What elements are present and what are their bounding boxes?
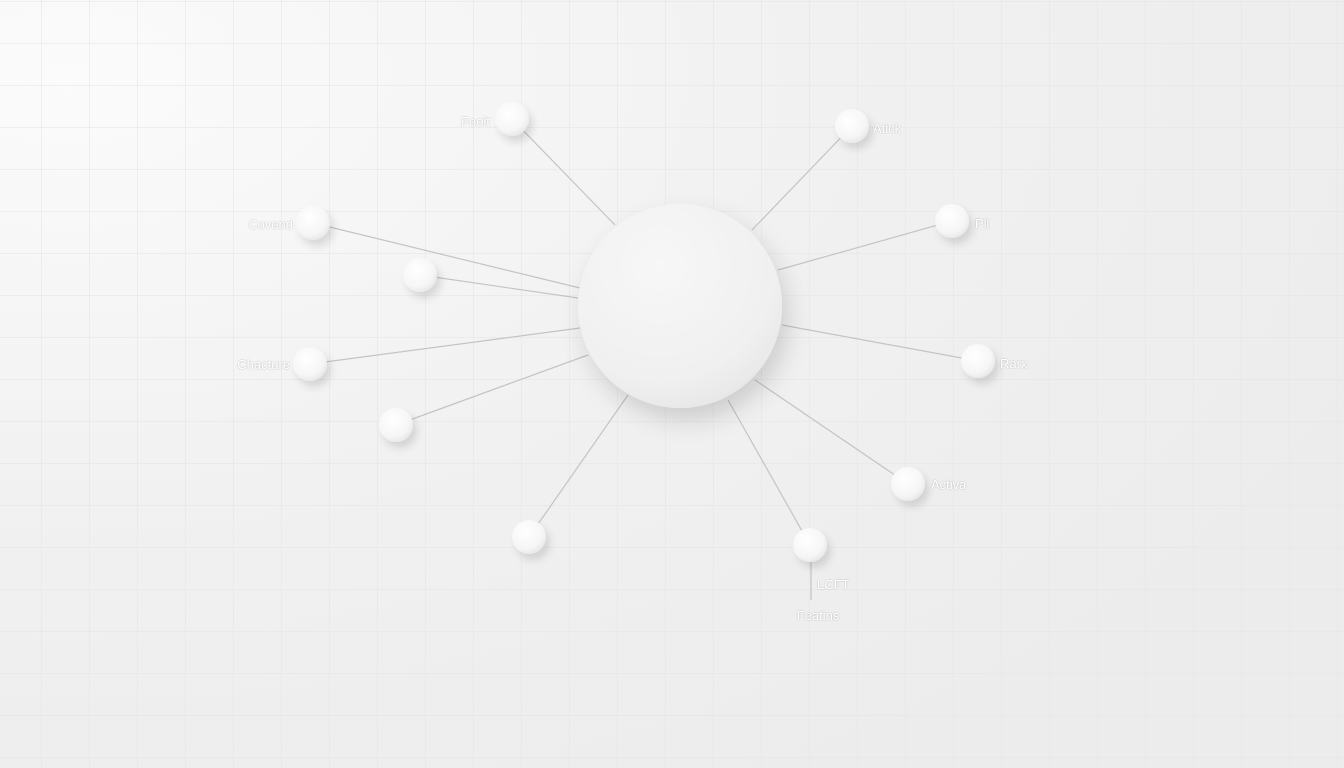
label: Pll: Pll — [975, 216, 990, 231]
nodes — [293, 102, 995, 562]
node: Atick — [835, 109, 869, 143]
label: Activa: Activa — [931, 477, 967, 492]
label: Featins: Featins — [797, 608, 840, 623]
node: unlabelled lower left — [379, 408, 413, 442]
node: Fooit — [495, 102, 529, 136]
labels — [237, 114, 1028, 623]
node: Chacture — [293, 347, 327, 381]
central hub — [578, 204, 782, 408]
label: Rarx: Rarx — [1000, 356, 1028, 371]
label: Fooit: Fooit — [461, 114, 490, 129]
node: Activa — [891, 467, 925, 501]
label: Chacture: Chacture — [237, 357, 290, 372]
node: Pll — [935, 204, 969, 238]
label: Covend: Covend — [248, 217, 293, 232]
node: Rarx — [961, 344, 995, 378]
node: unlabelled bottom — [512, 520, 546, 554]
node: LCFT — [793, 528, 827, 562]
node: Covend — [296, 206, 330, 240]
label: Atick: Atick — [873, 121, 902, 136]
node: unlabelled upper left — [403, 258, 437, 292]
connector lines — [310, 119, 978, 600]
label: LCFT: LCFT — [817, 577, 850, 592]
